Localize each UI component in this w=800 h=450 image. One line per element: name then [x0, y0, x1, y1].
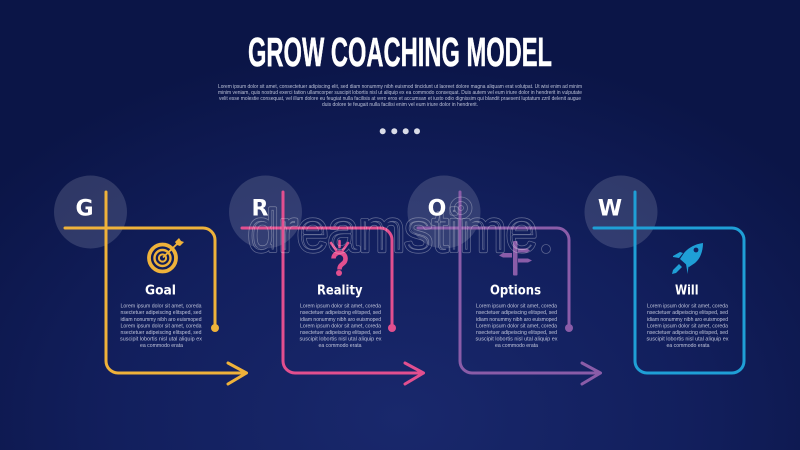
icon: rocket — [672, 243, 703, 274]
letter circle W — [584, 176, 658, 248]
options body text: nsectetuer adipeiscing elitsped, sed — [476, 310, 557, 316]
pagination dots — [380, 128, 420, 134]
intro text block: duis dolore te feugait nulla facilisi enim vel eum iriure dolor in hendrerit. — [322, 102, 478, 108]
heading Options: Options — [490, 283, 541, 298]
goal body text: Lorem ipsum dolor sit amet, coreda — [120, 323, 202, 329]
icon: question mark with rays — [331, 241, 348, 276]
panel: Will — [584, 176, 744, 373]
letter G: G — [75, 196, 94, 222]
intro text block — [218, 84, 582, 108]
reality body text: Lorem ipsum dolor sit amet, coreda — [300, 304, 381, 310]
will body text — [646, 304, 729, 349]
heading Reality: Reality — [317, 283, 363, 298]
will body text: ea commodo erata — [666, 343, 710, 349]
options body text — [476, 304, 558, 349]
options arrow path — [418, 192, 600, 384]
reality arrow path — [242, 192, 424, 384]
icon: target — [149, 238, 184, 272]
letter O: O — [428, 196, 446, 222]
goal body text: nsectetuer adipeiscing elitsped, sed — [120, 330, 202, 336]
will body text: Lorem ipsum dolor sit amet, coreda — [647, 304, 728, 310]
intro text block: Lorem ipsum dolor sit amet, consectetuer adipiscing elit, sed diam nonummy nibh euismod tincidunt ut laoreet dolore magna aliquam erat volutpat. Ut wisi enim ad minim — [218, 84, 582, 90]
reality body text: Lorem ipsum dolor sit amet, coreda — [300, 323, 381, 329]
will body text: nsectetuer adipeiscing elitsped, sed — [647, 310, 728, 316]
will body text: nsectetuer adipeiscing elitsped, sed — [647, 330, 728, 336]
options body text: Lorem ipsum dolor sit amet, coreda — [476, 304, 557, 310]
goal body text: nsectetuer adipeiscing elitsped, sed — [120, 310, 202, 316]
letter circle O — [408, 176, 480, 248]
options body text: suscipit lobortis nisl utal aliquip ex — [476, 336, 558, 342]
intro text block: velit esse molestie consequat, vel illum dolore eu feugiat nulla facilisis at vero eros et accumsan et iusto odio dignissim qui blandit praesent luptatum zzril delenit augue — [219, 96, 581, 102]
reality body text: idiam nonummy nibh aro euismoped — [300, 317, 381, 323]
goal body text: ea commodo erata — [140, 343, 183, 349]
goal body text: Lorem ipsum dolor sit amet, coreda — [120, 304, 202, 310]
intro text block: minim veniam, quis nostrud exerci tation ullamcorper suscipit lobortis nisl ut aliquip ex ea commodo consequat. Duis autem vel eum iriure dolor in hendrerit in vulputate — [218, 90, 582, 96]
will frame — [594, 192, 744, 373]
title: GROW COACHING MODEL — [248, 29, 552, 75]
options body text: ea commodo erata — [495, 343, 538, 349]
goal body text: idiam nonummy nibh aro euismoped — [120, 317, 202, 323]
letter W: W — [598, 196, 622, 222]
options body text: nsectetuer adipeiscing elitsped, sed — [476, 330, 557, 336]
reality body text: suscipit lobortis nisl utal aliquip ex — [300, 336, 382, 342]
options body text: idiam nonummy nibh aro euismoped — [476, 317, 557, 323]
heading Goal: Goal — [145, 283, 176, 298]
panel: Options — [408, 176, 600, 384]
letter circle G — [54, 176, 127, 248]
will body text: idiam nonummy nibh aro euismoped — [647, 317, 728, 323]
reality body text: ea commodo erata — [318, 343, 362, 349]
reality body text — [300, 304, 382, 349]
will body text: suscipit lobortis nisl utal aliquip ex — [646, 336, 729, 342]
letter R: R — [252, 196, 269, 222]
heading Will: Will — [675, 283, 698, 298]
reality body text: nsectetuer adipeiscing elitsped, sed — [300, 310, 381, 316]
panel: Reality — [229, 176, 424, 384]
will body text: Lorem ipsum dolor sit amet, coreda — [647, 323, 728, 329]
goal body text: suscipit lobortis nisl utal aliquip ex — [120, 336, 202, 342]
goal body text — [120, 304, 202, 349]
watermark — [248, 196, 551, 254]
reality body text: nsectetuer adipeiscing elitsped, sed — [300, 330, 381, 336]
letter circle R — [229, 176, 302, 248]
goal arrow path — [65, 192, 246, 384]
panel: Goal — [54, 176, 246, 384]
icon: signpost — [499, 241, 532, 276]
options body text: Lorem ipsum dolor sit amet, coreda — [476, 323, 557, 329]
